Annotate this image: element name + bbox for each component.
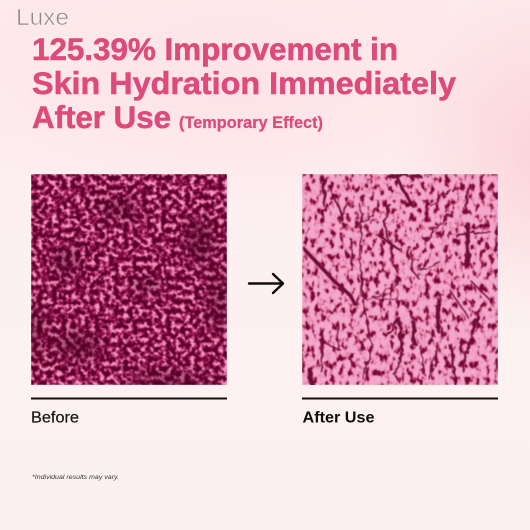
before skin image	[26, 174, 228, 388]
title	[32, 31, 456, 135]
arrow	[249, 274, 283, 293]
logo: Luxe: Luxe	[16, 4, 69, 30]
footnote: *Individual results may vary.	[32, 474, 119, 481]
title: After Use	[32, 99, 171, 135]
dark patches in before image	[26, 199, 228, 388]
after rule	[302, 398, 498, 400]
skin furrow lines	[304, 176, 490, 385]
title note: temporary effect: (Temporary Effect)	[179, 114, 323, 132]
label: after use: After Use	[302, 410, 375, 426]
title: 125.39% Improvement in	[32, 31, 398, 67]
after skin image	[302, 174, 498, 385]
title: Skin Hydration Immediately	[32, 65, 456, 101]
label: before: Before	[31, 410, 79, 426]
before rule	[31, 398, 227, 400]
